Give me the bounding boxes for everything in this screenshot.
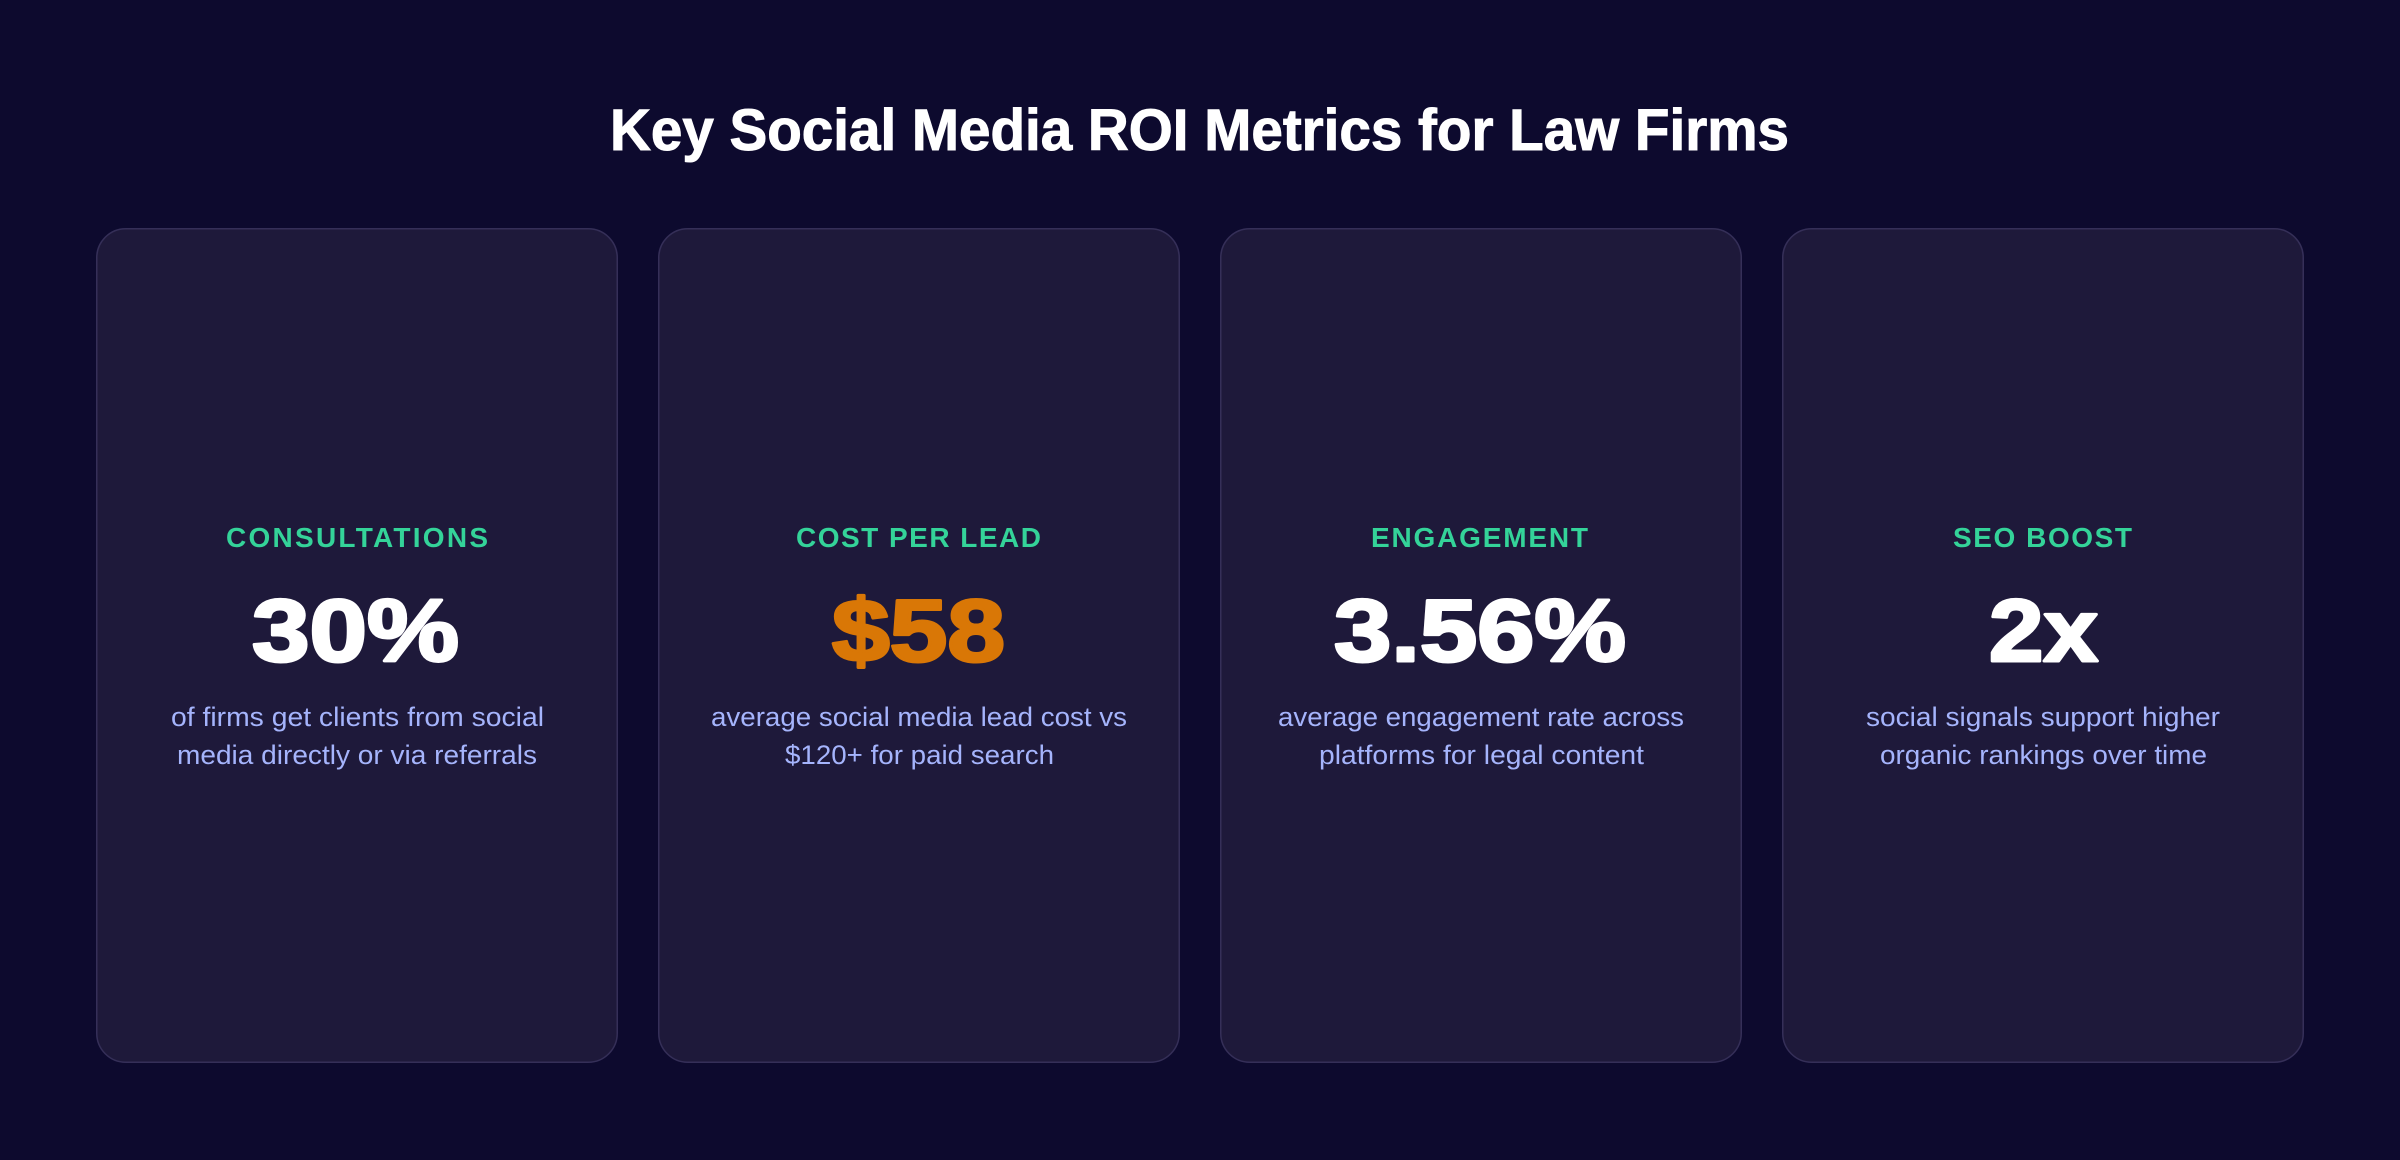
card background bbox=[1783, 229, 2303, 1062]
panel: engagement bbox=[1221, 229, 1741, 1062]
label: engagement: ENGAGEMENT bbox=[1371, 522, 1588, 553]
description: platforms for legal content bbox=[1319, 740, 1645, 770]
label: cost per lead: COST PER LEAD bbox=[796, 522, 1041, 553]
description: average engagement rate across bbox=[1278, 702, 1684, 732]
description: average social media lead cost vs bbox=[711, 702, 1127, 732]
description: of firms get clients from social bbox=[171, 702, 544, 732]
metric value: 30%: 30% bbox=[252, 581, 459, 680]
panel: seo boost bbox=[1783, 229, 2303, 1062]
metric value: $58: $58 bbox=[832, 581, 1005, 680]
card background bbox=[1221, 229, 1741, 1062]
description: media directly or via referrals bbox=[177, 740, 537, 770]
card background bbox=[659, 229, 1179, 1062]
panel: cost per lead bbox=[659, 229, 1179, 1062]
metric value: 2x: 2x bbox=[1989, 581, 2098, 680]
title: Key Social Media ROI Metrics for Law Firms bbox=[610, 98, 1789, 163]
metric value: 3.56%: 3.56% bbox=[1334, 581, 1626, 680]
panel: consultations bbox=[97, 229, 617, 1062]
card background bbox=[97, 229, 617, 1062]
description: social signals support higher bbox=[1866, 702, 2220, 732]
label: consultations: CONSULTATIONS bbox=[226, 522, 488, 553]
description: $120+ for paid search bbox=[785, 740, 1054, 770]
label: seo boost: SEO BOOST bbox=[1953, 522, 2132, 553]
description: organic rankings over time bbox=[1880, 740, 2207, 770]
